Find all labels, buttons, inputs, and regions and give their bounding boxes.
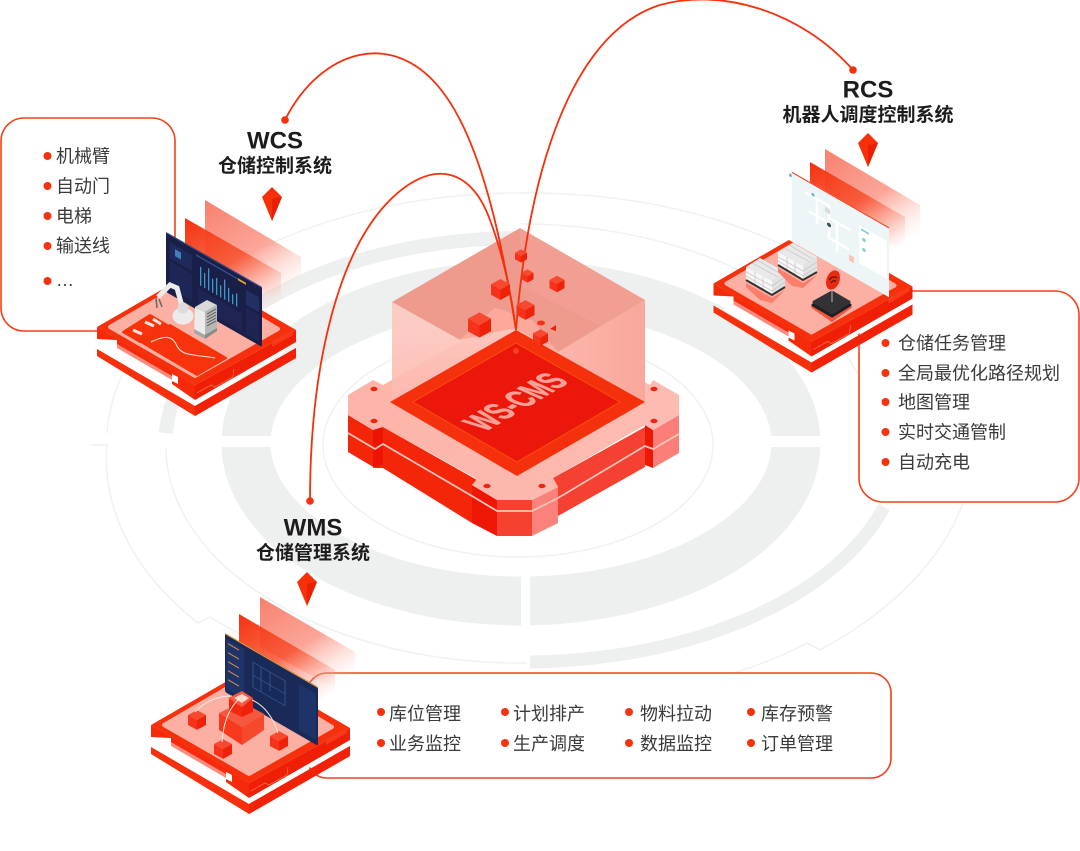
- map screen: [789, 170, 889, 297]
- wifi badge: [823, 268, 843, 292]
- platform side faces: [348, 415, 679, 536]
- arc: WCS connection: [281, 53, 516, 330]
- marker: WCS pin: [262, 187, 282, 221]
- WS-CMS label: WS-CMS: [453, 368, 578, 435]
- panel: WCS device list: 输送线: [56, 236, 110, 256]
- panel: WMS function list: 订单管理: [761, 734, 833, 754]
- WCS heading: 仓储控制系统: [218, 154, 332, 177]
- RCS platform illustration: [714, 149, 920, 372]
- panel: RCS function list: 仓储任务管理: [898, 334, 1006, 354]
- back panels: [810, 149, 920, 270]
- panel: WMS function list: 库位管理: [389, 704, 461, 724]
- panel: WCS device list: 电梯: [56, 206, 92, 226]
- marker: RCS pin: [858, 133, 878, 167]
- cube stack with QR: [219, 691, 264, 745]
- panel: RCS function list: 全局最优化路径规划: [898, 364, 1060, 384]
- pallet stack: front: [746, 258, 785, 303]
- panel: WCS device list: 自动门: [56, 176, 110, 196]
- pallet stack: back: [778, 243, 817, 288]
- platform top surface: [348, 310, 679, 500]
- panel: WMS function list: 数据监控: [640, 734, 712, 754]
- panel: WCS device list: 机械臂: [56, 146, 110, 166]
- panel: WCS device list: …: [56, 270, 74, 290]
- panel: WMS function list: 计划排产: [513, 704, 585, 724]
- server cabinet: [194, 300, 217, 339]
- RCS heading: RCS: [843, 76, 893, 104]
- warehouse screen: [225, 633, 318, 746]
- RCS heading: [782, 76, 954, 126]
- WMS heading: 仓储管理系统: [256, 541, 370, 564]
- panel: WMS function list: 生产调度: [513, 734, 585, 754]
- dashboard screen: [166, 232, 262, 347]
- panel: WCS device list: [1, 118, 175, 331]
- control pad: [123, 315, 226, 375]
- marker: WMS pin: [297, 572, 317, 606]
- RCS heading: 机器人调度控制系统: [782, 103, 954, 126]
- central screen square: [390, 330, 645, 476]
- floating data cubes: [468, 249, 564, 346]
- WCS heading: [218, 128, 332, 177]
- small warehouse cubes: [188, 710, 288, 759]
- base: [714, 228, 912, 372]
- background concentric rings: [90, 193, 963, 682]
- transparent cube: [392, 228, 645, 402]
- WCS heading: WCS: [247, 128, 303, 154]
- WMS platform illustration: [151, 597, 355, 814]
- robot arm: [156, 285, 194, 324]
- mounting holes: [370, 387, 658, 488]
- panel: RCS function list: 地图管理: [898, 392, 970, 412]
- panel: RCS function list: [859, 291, 1079, 502]
- base: [151, 669, 350, 814]
- panel: WMS function list: 库存预警: [761, 704, 833, 724]
- central WS-CMS platform: [348, 228, 679, 536]
- WMS heading: WMS: [284, 514, 342, 542]
- panel: WMS function list: 业务监控: [389, 734, 461, 754]
- base: [97, 271, 296, 416]
- back panels: [239, 597, 355, 720]
- panel: WMS function list: 物料拉动: [640, 704, 712, 724]
- panel: RCS function list: 自动充电: [898, 452, 970, 472]
- WMS heading: [256, 514, 370, 564]
- WCS platform illustration: [97, 200, 301, 416]
- connection arcs: [195, 696, 278, 742]
- AGV robot: [812, 282, 851, 321]
- arc: RCS connection: [516, 0, 857, 330]
- panel: WMS function list: [307, 673, 891, 778]
- back panels: [185, 200, 301, 330]
- panel: RCS function list: 实时交通管制: [898, 422, 1006, 442]
- arc: WMS connection: [306, 174, 519, 505]
